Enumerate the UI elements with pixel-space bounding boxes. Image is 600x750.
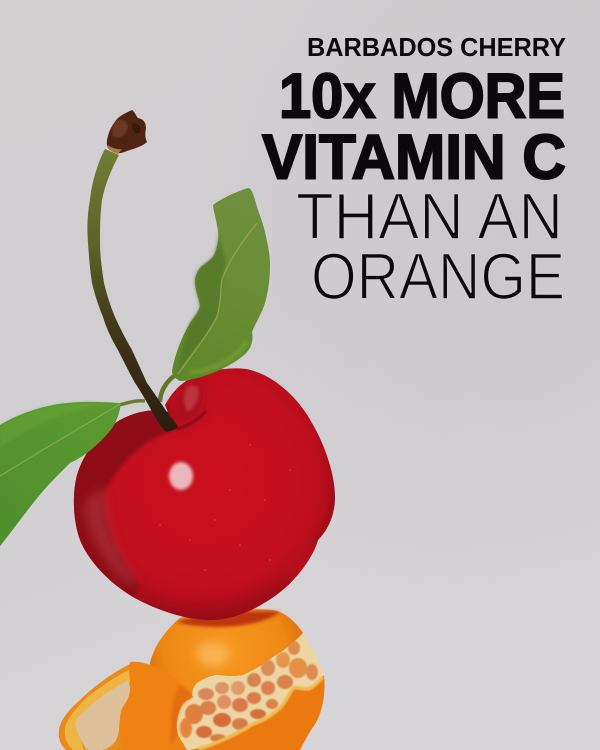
upper leaf darker half: [178, 232, 226, 372]
cherry: [74, 368, 335, 620]
headline: 10x more: 10x MORE: [279, 62, 565, 132]
peel flap pale pith: [75, 680, 130, 750]
title label: Barbados cherry: BARBADOS CHERRY: [307, 32, 566, 62]
crease: [177, 411, 206, 429]
bottom shade: [137, 578, 288, 620]
headline: orange: ORANGE: [311, 239, 565, 313]
orange peel lower rim: [187, 675, 325, 750]
upper leaf midrib: [178, 223, 257, 374]
skin highlights: [196, 642, 229, 666]
upper lobe behind crease: [168, 376, 206, 428]
left leaf blade: [0, 402, 121, 546]
right edge shade: [316, 450, 335, 546]
upper leaf petiole: [160, 376, 174, 402]
exposed flesh: [177, 633, 324, 750]
peel flap outer side: [119, 662, 193, 750]
left lobe shadow: [74, 404, 177, 598]
stem: [87, 149, 178, 432]
cherry shadow on orange: [176, 611, 280, 627]
calyx at stem tip: [107, 110, 147, 154]
left leaf: [0, 401, 145, 546]
headline: than an: THAN AN: [296, 179, 563, 253]
orange: [59, 609, 330, 750]
left leaf petiole: [119, 401, 145, 405]
highlight: [169, 462, 193, 490]
peel flap rim: [59, 664, 134, 750]
upper leaf blade: [172, 188, 270, 381]
cherry body: [74, 368, 335, 620]
headline: vitamin C: VITAMIN C: [262, 122, 566, 192]
orange peel top: [150, 609, 303, 700]
speckles: [159, 444, 291, 571]
upper leaf: [160, 188, 270, 402]
